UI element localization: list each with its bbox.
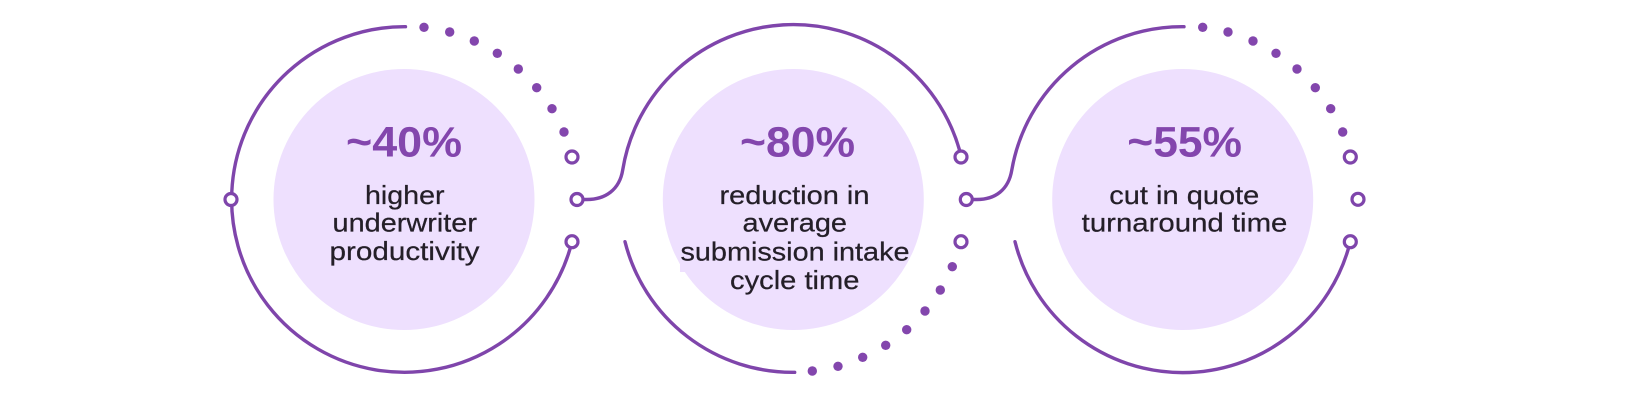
nodes 3 <box>960 151 1364 248</box>
ring arc 3 top with connector from metric 2 <box>973 27 1184 200</box>
disc 3 <box>1052 69 1313 330</box>
dotted arc 1 <box>419 23 569 137</box>
panel: metric 3, quote turnaround time <box>960 23 1364 373</box>
value 1: ~40% <box>346 119 462 167</box>
description 1 <box>330 180 480 266</box>
disc 2 <box>663 69 924 330</box>
nodes 1 <box>225 151 578 248</box>
description 3: turnaround time <box>1082 208 1287 238</box>
ring arc 2 top with connector from metric 1 <box>584 25 960 199</box>
description 2 <box>680 180 910 295</box>
disc 1 <box>274 69 534 330</box>
dotted arc 3 <box>1198 23 1347 137</box>
description 2: average <box>742 208 847 238</box>
description 1: underwriter <box>332 208 477 238</box>
value 2: ~80% <box>740 119 855 167</box>
value 3: ~55% <box>1127 119 1242 167</box>
description 1: productivity <box>330 236 480 266</box>
description 3 <box>1082 180 1287 238</box>
description 2: reduction in <box>720 180 870 210</box>
description 2: cycle time <box>730 265 860 295</box>
ring arc 1 <box>232 27 572 372</box>
description 1: higher <box>365 180 445 210</box>
ring arc 2 bottom <box>625 242 795 372</box>
description 2: submission intake <box>680 236 910 266</box>
dotted arc 2 <box>808 262 957 376</box>
panel: metric 1, higher underwriter productivity <box>225 23 578 372</box>
ring arc 3 bottom <box>1015 242 1350 373</box>
panel: metric 2, submission intake cycle time <box>571 25 967 376</box>
description 3: cut in quote <box>1109 180 1259 210</box>
nodes 2 <box>571 151 967 248</box>
